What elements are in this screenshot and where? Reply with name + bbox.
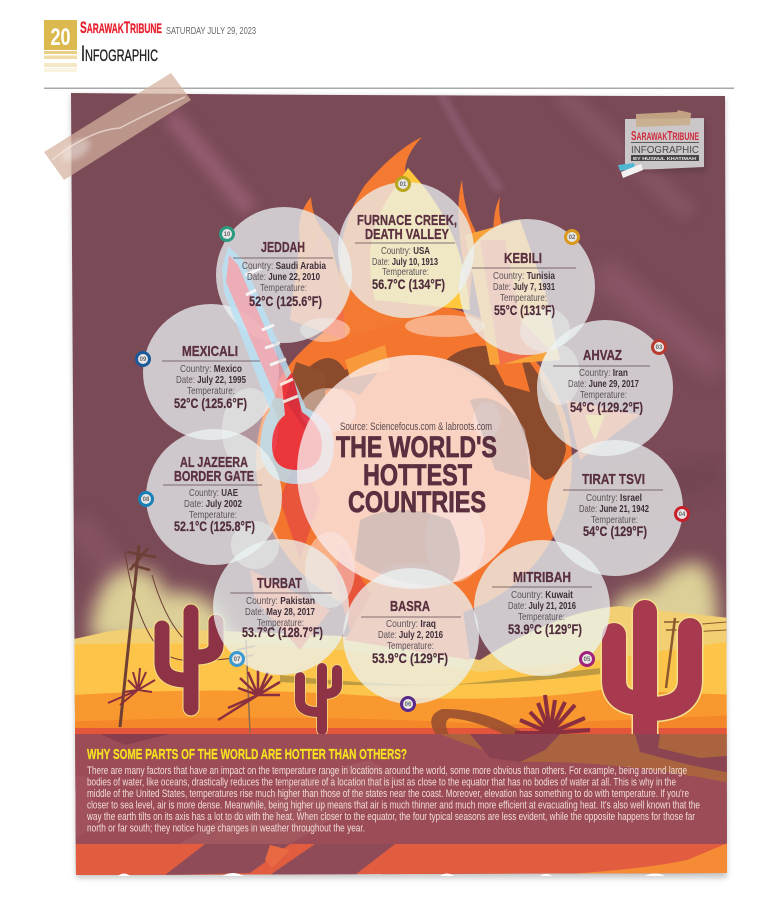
cactus right: [614, 612, 690, 745]
panel: Mexicali: Temperature:: [187, 385, 235, 397]
panel: Furnace Creek: Country: USA: [381, 245, 430, 257]
panel: Jeddah: Temperature:: [260, 282, 307, 294]
logo sticker: INFOGRAPHIC: [631, 145, 699, 156]
Mexicali bubble disc: [143, 304, 279, 440]
panel: Al Jazeera: Date: July 2002: [184, 498, 242, 510]
number badges: 04: [679, 512, 686, 518]
panel: Basra: [343, 568, 479, 704]
number badges: 10: [224, 232, 231, 238]
panel: Al Jazeera: 52.1°C (125.8°F): [174, 518, 255, 534]
newspaper masthead: SARAWAKTRIBUNE: [80, 18, 162, 37]
panel: Furnace Creek: 56.7°C (134°F): [372, 276, 445, 292]
smoke clouds: [222, 308, 580, 608]
panel: Basra: Country: Iraq: [386, 618, 436, 630]
desert glow: [90, 563, 718, 650]
panel: Mitribah: MITRIBAH: [513, 569, 571, 586]
panel: Mexicali: MEXICALI: [182, 343, 238, 360]
panel: Turbat: Country: Pakistan: [246, 595, 315, 607]
main flames: [250, 137, 640, 660]
planet: [256, 304, 572, 620]
cactus middle: [300, 668, 337, 730]
panel: Furnace Creek: FURNACE CREEK,: [357, 212, 457, 229]
panel: Turbat: Temperature:: [257, 617, 304, 629]
source line: Source: Sciencefocus.com & labroots.com: [340, 421, 492, 433]
globe panel: [297, 355, 531, 589]
text panel background: [60, 734, 740, 884]
panel: Jeddah: JEDDAH: [261, 239, 305, 256]
number badges: 07: [234, 657, 241, 663]
panel: Ahvaz: Temperature:: [580, 389, 627, 401]
panel: Turbat: Date: May 28, 2017: [245, 606, 315, 618]
panel: Kebili: Date: July 7, 1931: [493, 281, 555, 293]
panel: Mexicali: [162, 346, 260, 412]
panel: Al Jazeera: [146, 429, 282, 565]
panel: Basra: 53.9°C (129°F): [372, 650, 448, 666]
panel: Kebili: 55°C (131°F): [494, 302, 555, 318]
panel: Mitribah: Country: Kuwait: [511, 589, 573, 601]
panel: Mitribah: [474, 540, 610, 676]
panel: Mitribah: 53.9°C (129°F): [508, 621, 582, 637]
panel: Mexicali: Date: July 22, 1995: [176, 374, 246, 386]
panel: Basra: Date: July 2, 2016: [378, 629, 443, 641]
panel: Mitribah: Temperature:: [518, 611, 565, 623]
number badges: [135, 176, 690, 712]
thermometer: [222, 246, 334, 484]
panel: Tirat Tsvi: Temperature:: [591, 514, 638, 526]
panel: Turbat: 53.7°C (128.7°F): [242, 624, 323, 640]
panel: Ahvaz: AHVAZ: [583, 347, 622, 364]
panel: Tirat Tsvi: Country: Israel: [586, 492, 642, 504]
panel: Turbat: TURBAT: [257, 575, 302, 592]
road: [431, 709, 522, 734]
agave plants: [108, 668, 590, 733]
panel: Basra: BASRA: [390, 598, 430, 615]
page number tab: 20: [50, 24, 70, 51]
number badges: 06: [405, 702, 412, 708]
section title: INFOGRAPHIC: [81, 41, 158, 66]
number badges: 03: [656, 345, 663, 351]
panel: Al Jazeera: Temperature:: [189, 509, 237, 521]
panel: Jeddah: [233, 242, 333, 310]
page number tab: [44, 20, 77, 72]
panel: Ahvaz: Date: June 29, 2017: [568, 378, 639, 390]
panel: Tirat Tsvi: 54°C (129°F): [583, 523, 647, 539]
panel: Al Jazeera: AL JAZEERA: [180, 454, 248, 471]
logo sticker: BY HUSNUL KHATIMAH: [633, 156, 696, 161]
panel: Tirat Tsvi: [547, 440, 683, 576]
panel: Kebili: Country: Tunisia: [493, 270, 555, 282]
panel: Turbat: [213, 539, 349, 675]
panel: Mexicali: Country: Mexico: [180, 363, 242, 375]
explanation body: north or far south; they notice huge changes in weather throughout the year.: [87, 822, 365, 834]
panel: Furnace Creek: Temperature:: [382, 266, 429, 278]
utility pole center: [237, 640, 255, 733]
panel: Furnace Creek: [338, 182, 474, 318]
desert ground: [60, 606, 740, 740]
poster artwork: [60, 85, 740, 885]
number badges: 05: [584, 657, 591, 663]
panel: Basra: Temperature:: [387, 640, 434, 652]
panel: Jeddah: 52°C (125.6°F): [249, 293, 322, 309]
panel: Kebili: Temperature:: [500, 292, 547, 304]
explanation heading: WHY SOME PARTS OF THE WORLD ARE HOTTER THAN OTHERS?: [87, 747, 407, 763]
panel: Mitribah: Date: July 21, 2016: [508, 600, 576, 612]
Jeddah bubble disc: [216, 207, 352, 343]
torn bottom edge: [118, 873, 665, 876]
poster shadow: [71, 95, 727, 878]
main title: COUNTRIES: [348, 486, 486, 519]
panel: Mexicali: 52°C (125.6°F): [174, 395, 247, 411]
publication date: SATURDAY JULY 29, 2023: [166, 25, 256, 37]
panel: Ahvaz: [537, 320, 673, 456]
panel: Ahvaz: 54°C (129.2°F): [570, 399, 643, 415]
number badges: 01: [400, 182, 407, 188]
cactus left: [162, 612, 216, 708]
number badges: 08: [143, 497, 150, 503]
utility pole right: [664, 618, 727, 688]
panel: Al Jazeera: Country: UAE: [189, 487, 238, 499]
panel: Furnace Creek: DEATH VALLEY: [365, 226, 449, 243]
panel: Kebili: KEBILI: [504, 250, 542, 267]
panel: Furnace Creek: Date: July 10, 1913: [372, 256, 438, 268]
panel: Kebili: [459, 219, 595, 355]
panel: Tirat Tsvi: Date: June 21, 1942: [579, 503, 649, 515]
logo sticker: SARAWAKTRIBUNE: [631, 128, 699, 143]
utility pole left: [120, 545, 235, 727]
panel: Al Jazeera: BORDER GATE: [174, 468, 254, 485]
main title: HOTTEST: [363, 459, 472, 492]
main title: [336, 436, 496, 513]
panel: Tirat Tsvi: TIRAT TSVI: [582, 471, 645, 488]
number badges: 09: [140, 357, 147, 363]
number badges: 02: [569, 235, 576, 241]
panel: Ahvaz: Country: Iran: [579, 367, 628, 379]
explanation body: [86, 765, 700, 834]
panel: Jeddah: Country: Saudi Arabia: [242, 260, 326, 272]
panel: Jeddah: Date: June 22, 2010: [247, 271, 320, 283]
logo sticker: [618, 110, 706, 178]
tape: [44, 73, 191, 180]
main title: THE WORLD'S: [336, 431, 497, 464]
